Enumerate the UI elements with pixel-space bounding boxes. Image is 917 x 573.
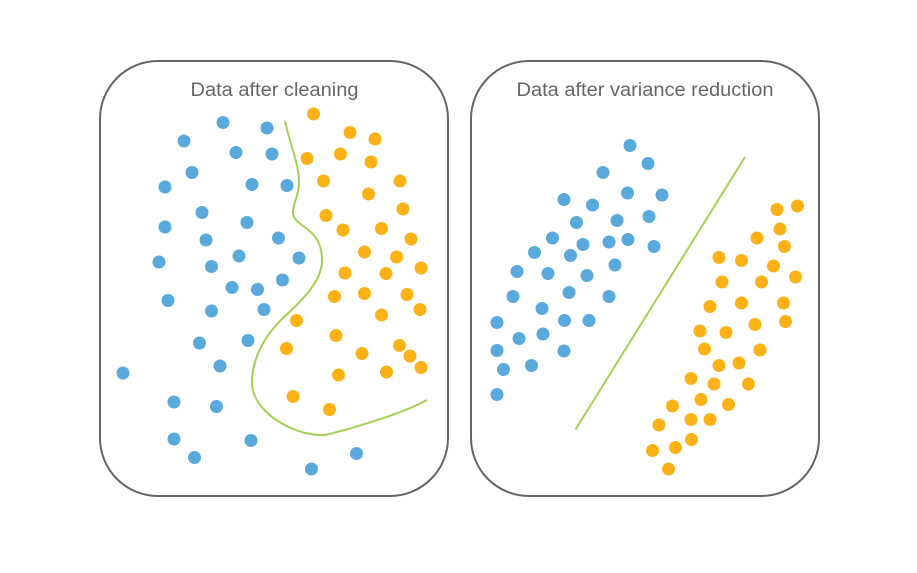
separating line — [576, 157, 745, 430]
heading left: Data after cleaning — [190, 80, 358, 101]
panel frame right — [471, 61, 819, 496]
decision boundary curve — [252, 121, 427, 435]
blue points right — [490, 139, 668, 401]
blue points left — [116, 116, 363, 476]
orange points left — [280, 108, 428, 416]
panel: data after cleaning — [100, 61, 448, 496]
heading right: Data after variance reduction — [516, 80, 774, 101]
panel: data after variance reduction — [471, 61, 819, 496]
panel frame left — [100, 61, 448, 496]
orange points right — [646, 200, 804, 476]
